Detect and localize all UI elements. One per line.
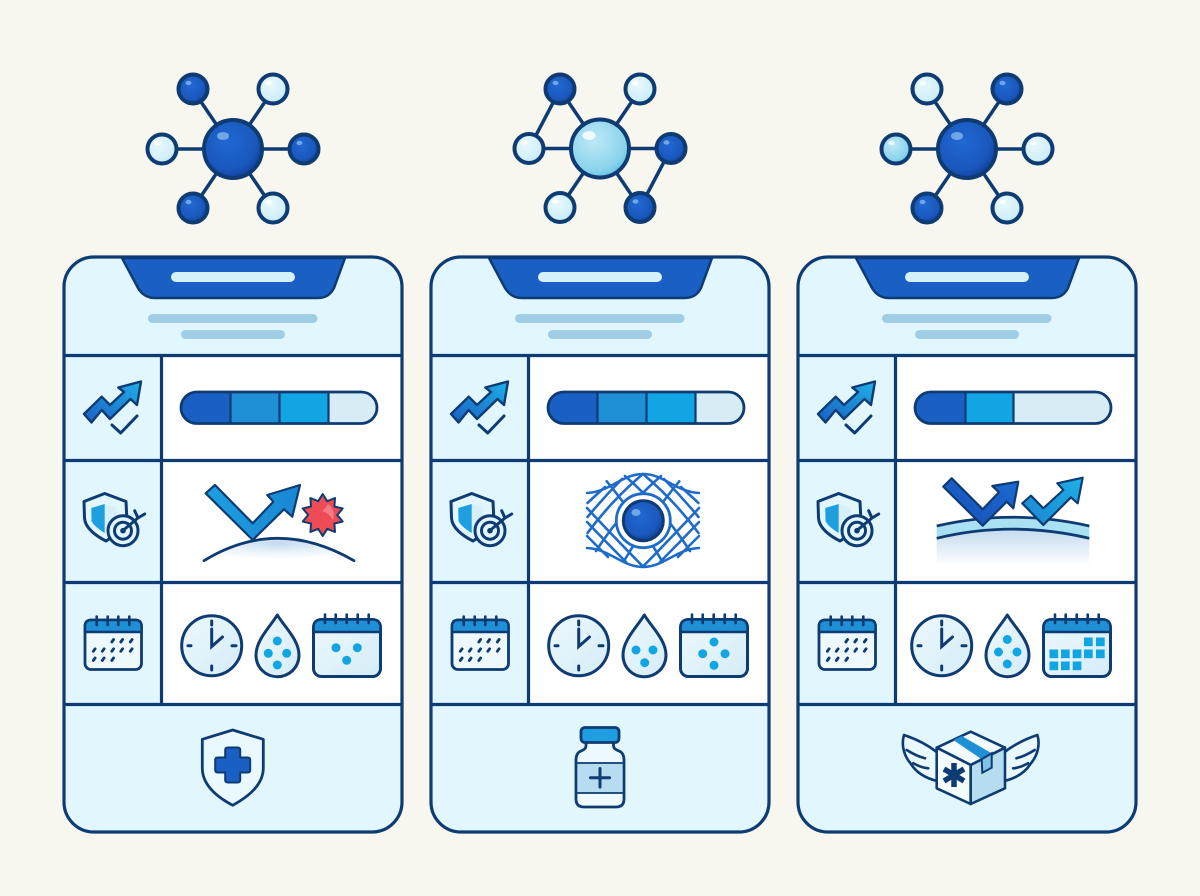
schedule row 2 [549, 614, 748, 677]
icon: calendar [819, 616, 876, 670]
icon: shield and target [451, 494, 512, 546]
icon: shield and target [84, 494, 145, 546]
icon: clock [912, 616, 972, 676]
icon: clock [549, 616, 609, 676]
icon: three-dot drop [623, 615, 666, 677]
icon: trend with check [84, 382, 141, 433]
network diagram 1 [148, 74, 318, 222]
icon: winged package [903, 732, 1039, 804]
icon: shield with cross [202, 730, 263, 805]
icon: calendar [85, 616, 142, 670]
network diagram 3 [882, 74, 1052, 222]
progress bar 3 [915, 392, 1111, 424]
icon: four-dot calendar [680, 614, 748, 676]
icon: filled calendar [1044, 614, 1110, 676]
card header 1 [148, 272, 318, 339]
card frame 1 [64, 257, 402, 832]
icon: calendar [452, 616, 508, 670]
card header 2 [515, 272, 684, 339]
card header 3 [882, 272, 1052, 339]
schedule row 1 [182, 614, 380, 677]
panel: column 2 [431, 74, 769, 832]
icon: three-dot calendar [314, 614, 380, 676]
progress bar 2 [548, 392, 744, 424]
panel: column 3 [798, 74, 1136, 832]
schedule row 3 [912, 614, 1110, 677]
icon: four-dot drop [986, 615, 1029, 677]
illustration: particle in mesh [587, 474, 699, 567]
illustration: arrows bouncing off layered surface [937, 478, 1089, 566]
panel: column 1 [64, 74, 402, 832]
icon: clock [182, 616, 242, 676]
icon: trend with check [451, 382, 508, 433]
icon: four-dot drop [256, 615, 299, 677]
icon: shield and target [818, 494, 879, 546]
illustration: arrow bouncing off surface [204, 485, 354, 561]
icon: vial [576, 728, 624, 807]
network diagram 2 [514, 74, 686, 222]
card frame 3 [798, 257, 1136, 832]
icon: trend with check [818, 382, 875, 433]
card frame 2 [431, 257, 769, 832]
progress bar 1 [181, 392, 377, 424]
